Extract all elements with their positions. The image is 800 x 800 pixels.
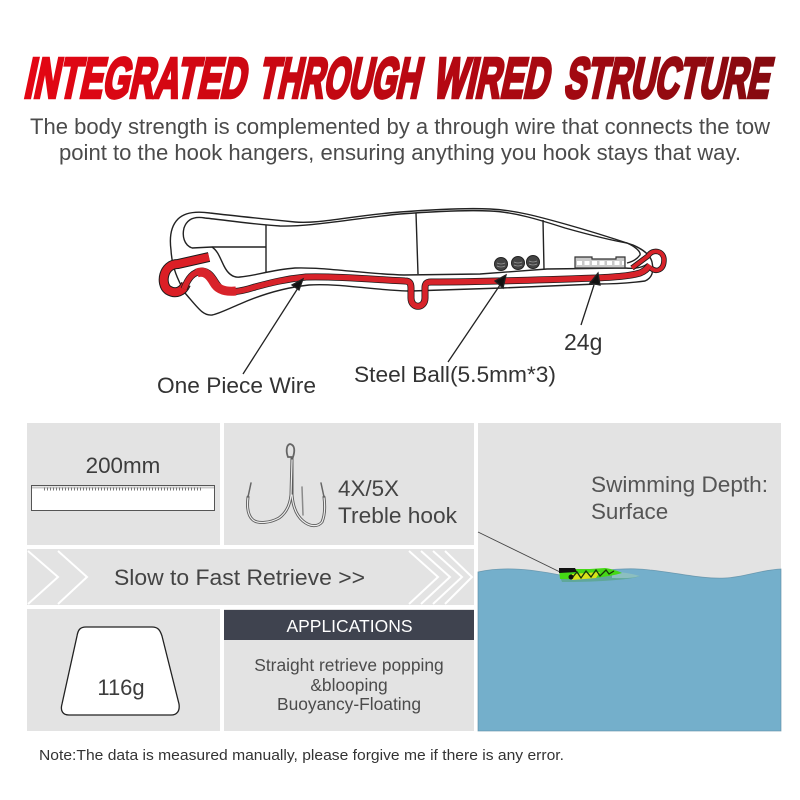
panel: weight: 116g <box>97 675 145 700</box>
label: steel ball: Steel Ball(5.5mm*3) <box>354 362 556 387</box>
applications header: APPLICATIONS <box>286 616 413 636</box>
subtitle text <box>30 114 770 165</box>
lure body outline <box>170 209 653 315</box>
banner: retrieve <box>27 549 474 605</box>
lure structure diagram <box>157 209 664 398</box>
subtitle text: The body strength is complemented by a through wire that connects the tow <box>30 114 770 139</box>
wire right ring and hook <box>632 251 664 270</box>
applications text: Straight retrieve popping <box>254 655 444 675</box>
lure illustration <box>559 568 640 582</box>
wire left ring and bar <box>164 257 209 292</box>
hook label <box>338 476 458 528</box>
depth text <box>591 472 768 524</box>
red through wire <box>164 251 664 306</box>
fishing line <box>478 532 560 572</box>
label: 24g: 24g <box>564 329 602 355</box>
note: Note:The data is measured manually, please forgive me if there is any error. <box>39 747 564 764</box>
depth text: Surface <box>591 499 668 524</box>
wire main run <box>184 265 650 306</box>
hook label: 4X/5X <box>338 476 399 501</box>
panel: weight <box>27 609 220 731</box>
ruler <box>32 486 214 510</box>
title <box>20 48 779 111</box>
icon: treble hook <box>248 444 325 526</box>
hook label: Treble hook <box>338 503 458 528</box>
applications text <box>254 655 444 714</box>
panel: swimming depth <box>478 423 781 731</box>
depth text: Swimming Depth: <box>591 472 768 497</box>
applications text: Buoyancy-Floating <box>277 694 421 714</box>
weight icon <box>61 627 179 715</box>
title: INTEGRATED <box>20 48 255 111</box>
label: one piece wire: One Piece Wire <box>157 373 316 398</box>
title: STRUCTURE <box>560 48 779 111</box>
panel: length: 200mm <box>86 453 160 478</box>
panel: applications <box>224 609 474 731</box>
subtitle text: point to the hook hangers, ensuring anything you hook stays that way. <box>59 140 741 165</box>
title: WIRED <box>429 48 558 111</box>
arrows <box>243 273 600 374</box>
steel balls <box>494 256 540 270</box>
water <box>478 569 781 731</box>
panel: treble hook <box>224 423 474 545</box>
weight block <box>575 257 625 268</box>
title: THROUGH <box>254 48 429 111</box>
applications text: &blooping <box>310 675 388 695</box>
panel: length <box>27 423 220 545</box>
applications header <box>224 610 474 640</box>
banner: retrieve: Slow to Fast Retrieve >> <box>114 565 365 590</box>
